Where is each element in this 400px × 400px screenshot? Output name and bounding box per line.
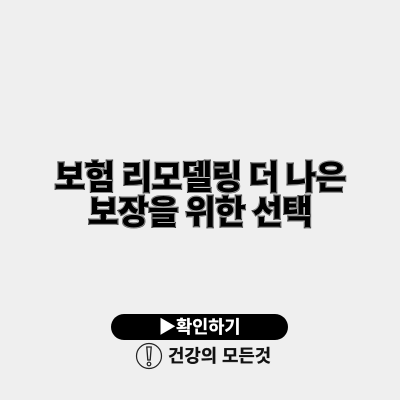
button: confirm: [111, 314, 288, 340]
button: confirm: ▶확인하기: [159, 317, 240, 337]
title: 보험 리모델링 더 나은: [54, 160, 346, 197]
icon: exclamation circle: [136, 342, 162, 370]
brand: health: [136, 342, 271, 370]
title: [54, 159, 346, 232]
title: 보장을 위한 선택: [88, 195, 312, 232]
brand name: 건강의 모든것: [168, 346, 271, 366]
